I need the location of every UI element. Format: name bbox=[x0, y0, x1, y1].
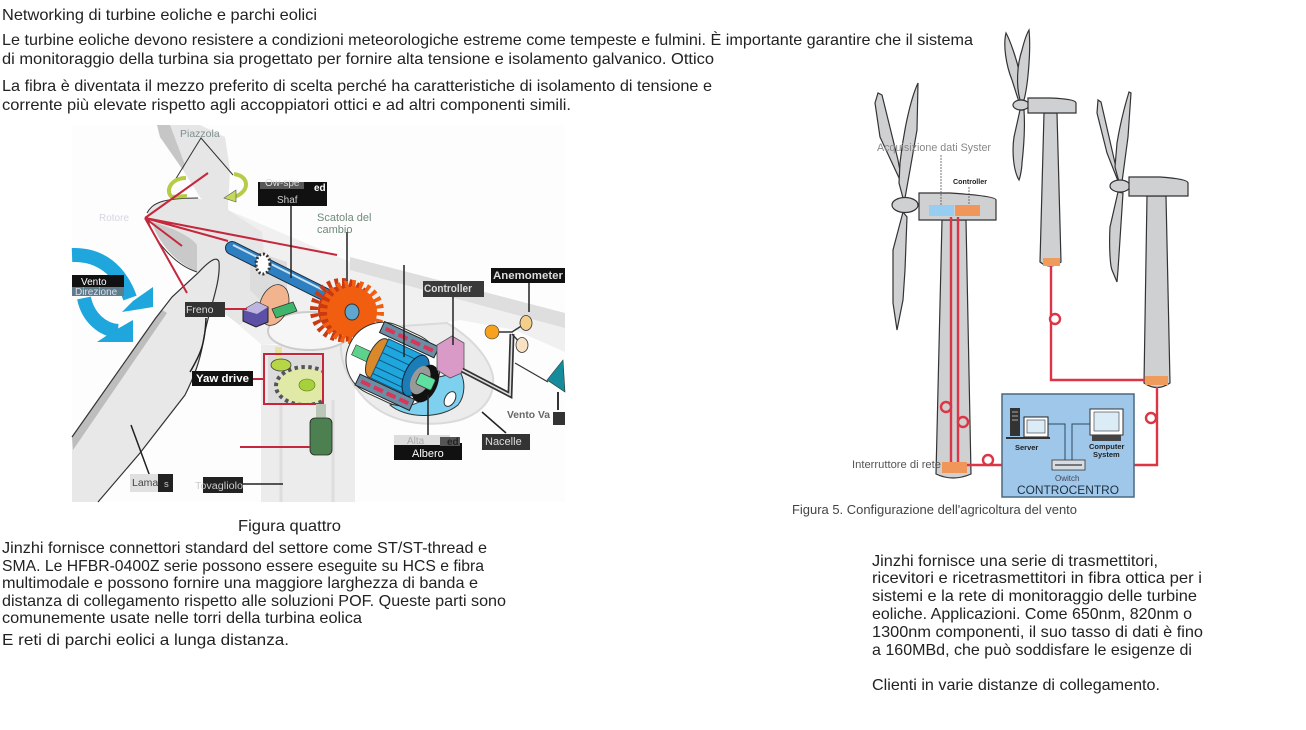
label: network switch: Interruttore di rete bbox=[852, 459, 941, 471]
label: acquisition system: Acquisizione dati Syster bbox=[877, 142, 991, 154]
label: computer system: System bbox=[1093, 450, 1120, 459]
label: switch: Owitch bbox=[1055, 474, 1079, 483]
left paragraph bbox=[2, 540, 506, 649]
label: high speed shaft: ed bbox=[447, 437, 459, 448]
left paragraph: E reti di parchi eolici a lunga distanza. bbox=[2, 632, 289, 649]
left paragraph: comunemente usate nelle torri della turbina eolica bbox=[2, 610, 362, 627]
right paragraph: eoliche. Applicazioni. Come 650nm, 820nm o bbox=[872, 606, 1192, 623]
hub bbox=[147, 198, 268, 325]
turbine 2 bbox=[1005, 30, 1076, 266]
nacelle roof band bbox=[210, 210, 565, 352]
intro paragraph 1: di monitoraggio della turbina sia progettato per fornire alta tensione e isolamento galvanico. Ottico bbox=[2, 51, 714, 68]
label: low speed shaft bbox=[258, 178, 327, 206]
intro paragraph 2 bbox=[2, 78, 712, 114]
red leader lines bbox=[145, 173, 337, 447]
yaw motor bbox=[310, 404, 332, 455]
label: computer system bbox=[1089, 442, 1124, 459]
label: gearbox: cambio bbox=[317, 224, 352, 236]
label: wind vane: Vento Va bbox=[507, 409, 550, 421]
anemometer bbox=[462, 316, 532, 395]
label: Rotore: Rotore bbox=[99, 213, 129, 224]
right paragraph: 1300nm componenti, il suo tasso di dati è fino bbox=[872, 624, 1203, 641]
wind vane bbox=[515, 360, 565, 425]
label: controller: Controller bbox=[424, 283, 473, 295]
intro paragraph 1 bbox=[2, 30, 973, 68]
label: wind direction bbox=[72, 275, 124, 298]
label: computer system: Computer bbox=[1089, 442, 1124, 451]
label: tower: Tovagliolo bbox=[195, 481, 243, 492]
label: server: Server bbox=[1015, 443, 1038, 452]
label: gearbox: Scatola del bbox=[317, 212, 371, 224]
label: low speed shaft: Ow-spe bbox=[265, 178, 300, 189]
control centre panel bbox=[1002, 394, 1134, 497]
label: anemometer: Anemometer bbox=[493, 270, 564, 282]
gearbox gear bbox=[314, 282, 380, 340]
right paragraph bbox=[872, 553, 1203, 694]
label: control centre: CONTROCENTRO bbox=[1017, 483, 1119, 497]
yaw bearing plate bbox=[268, 312, 352, 350]
intro paragraph 2: corrente più elevate rispetto agli accoppiatori ottici e ad altri componenti simili. bbox=[2, 97, 571, 114]
label: brake: Freno bbox=[186, 304, 214, 316]
computer icon bbox=[1090, 409, 1123, 441]
label: Piazzola: Piazzola bbox=[180, 128, 220, 140]
label: yaw drive: Yaw drive bbox=[196, 373, 249, 385]
turbine 1 bbox=[875, 83, 996, 478]
black leader lines bbox=[131, 205, 529, 484]
label: blades: Lama bbox=[132, 477, 158, 489]
tower bbox=[261, 345, 355, 502]
intro paragraph 1: Le turbine eoliche devono resistere a condizioni meteorologiche estreme come tempeste e fulmini. È importante garantire che il sistema bbox=[2, 30, 973, 49]
bearing pedestal bbox=[250, 250, 287, 300]
label: blades bbox=[130, 474, 173, 492]
label: controller bbox=[423, 281, 484, 297]
right paragraph: sistemi e la rete di monitoraggio delle turbine bbox=[872, 588, 1197, 605]
right paragraph: Jinzhi fornisce una serie di trasmettitori, bbox=[872, 553, 1158, 570]
label: nacelle bbox=[482, 434, 530, 450]
switch device bbox=[1052, 460, 1085, 470]
label: wind direction: Direzione bbox=[75, 287, 118, 298]
label: wind direction: Vento bbox=[81, 277, 107, 288]
label: nacelle: Nacelle bbox=[485, 436, 522, 448]
figure 5 caption: Figura 5. Configurazione dell'agricoltura del vento bbox=[792, 502, 1077, 517]
label: brake bbox=[185, 302, 225, 317]
label: low speed shaft: Shaf bbox=[277, 195, 298, 206]
label: yaw drive bbox=[192, 371, 253, 386]
server icon bbox=[1006, 408, 1050, 439]
network switch box on tower bbox=[942, 462, 967, 473]
fibre optic red links bbox=[941, 217, 1157, 465]
label: controller: Controller bbox=[953, 177, 987, 186]
upper blade bbox=[157, 125, 230, 227]
right paragraph: ricevitori e ricetrasmettitori in fibra ottica per i bbox=[872, 570, 1202, 587]
left paragraph: distanza di collegamento rispetto alle soluzioni POF. Queste parti sono bbox=[2, 593, 506, 610]
left paragraph: Jinzhi fornisce connettori standard del settore come ST/ST-thread e bbox=[2, 540, 487, 557]
controller box bbox=[437, 336, 464, 378]
figure 5: wind farm configuration diagram bbox=[852, 30, 1188, 497]
generator bbox=[334, 310, 453, 419]
figure 4 caption: Figura quattro bbox=[238, 518, 341, 535]
wind direction arrows bbox=[72, 255, 130, 331]
lower blade bbox=[72, 259, 219, 502]
nacelle shell bbox=[341, 323, 493, 424]
low speed shaft bbox=[232, 245, 327, 295]
label: tower bbox=[195, 477, 243, 493]
brake assembly bbox=[243, 280, 297, 330]
label: blades: s bbox=[164, 479, 169, 490]
pitch arrows bbox=[169, 138, 246, 197]
label: high speed shaft: Albero bbox=[412, 448, 444, 460]
nacelle floor bbox=[390, 372, 464, 416]
title: Networking di turbine eoliche e parchi eolici bbox=[2, 7, 317, 24]
label: high speed shaft: Alta bbox=[407, 436, 425, 447]
left paragraph: SMA. Le HFBR-0400Z serie possono essere eseguite su HCS e fibra bbox=[2, 558, 484, 575]
label: gearbox bbox=[317, 212, 371, 236]
figure 4: wind turbine cutaway diagram bbox=[72, 125, 565, 502]
turbine 3 bbox=[1097, 92, 1188, 388]
data acquisition and controller blocks bbox=[929, 205, 980, 216]
intro paragraph 2: La fibra è diventata il mezzo preferito di scelta perché ha caratteristiche di isolamento di tensione e bbox=[2, 78, 712, 95]
right paragraph: Clienti in varie distanze di collegamento. bbox=[872, 677, 1160, 694]
label: low speed shaft: ed bbox=[314, 183, 326, 194]
left paragraph: multimodale e possono fornire una maggiore larghezza di banda e bbox=[2, 575, 478, 592]
right paragraph: a 160MBd, che può soddisfare le esigenze di bbox=[872, 642, 1192, 659]
label: high speed shaft bbox=[394, 435, 462, 460]
yaw drive bbox=[263, 347, 324, 405]
